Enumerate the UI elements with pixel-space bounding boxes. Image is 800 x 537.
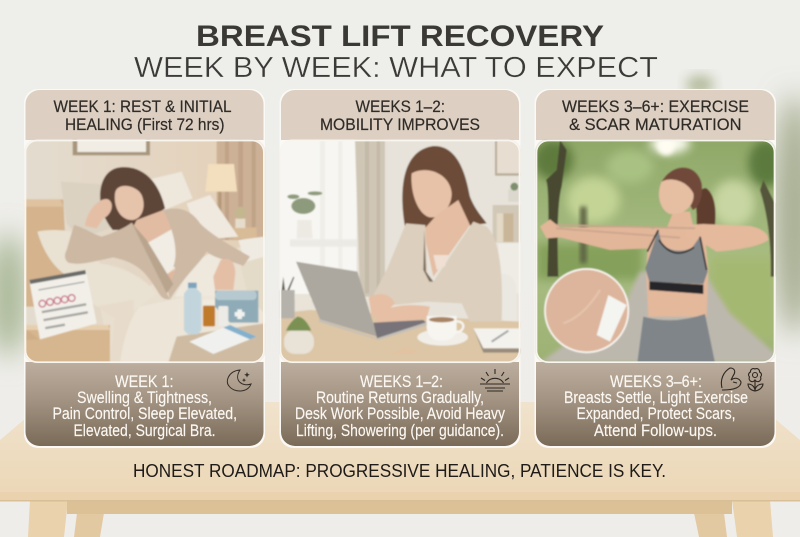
- title: BREAST LIFT RECOVERY: [196, 20, 604, 53]
- panel frame week 1: [24, 89, 265, 448]
- description weeks 1-2: WEEKS 1–2:: [360, 373, 443, 391]
- description week 1: Elevated, Surgical Bra.: [74, 422, 216, 440]
- panel frame weeks 3-6+: [534, 89, 776, 448]
- illustration: woman working on laptop: [280, 140, 520, 363]
- heading weeks 3-6+: & SCAR MATURATION: [569, 115, 742, 134]
- description week 1: Pain Control, Sleep Elevated,: [52, 405, 237, 423]
- description weeks 3-6+: Expanded, Protect Scars,: [576, 405, 736, 423]
- heading weeks 1-2: MOBILITY IMPROVES: [320, 115, 480, 134]
- heading week 1: [54, 97, 232, 134]
- illustration: woman resting in bed: [23, 137, 264, 363]
- heading weeks 3-6+: [562, 97, 749, 134]
- icon: flexed arm: [721, 368, 741, 390]
- panel: weeks 1-2: [280, 89, 520, 448]
- subtitle: WEEK BY WEEK: WHAT TO EXPECT: [134, 52, 658, 84]
- panel frame weeks 1-2: [280, 89, 520, 448]
- heading week 1: WEEK 1: REST & INITIAL: [54, 97, 232, 116]
- footer message: HONEST ROADMAP: PROGRESSIVE HEALING, PATIENCE IS KEY.: [133, 460, 666, 481]
- icon: moon and stars: [227, 370, 251, 391]
- panel: week 1: [23, 89, 265, 448]
- heading weeks 1-2: WEEKS 1–2:: [356, 97, 445, 116]
- description week 1: Swelling & Tightness,: [77, 389, 212, 407]
- panel: weeks 3-6+: [533, 89, 785, 448]
- description week 1: [52, 373, 237, 440]
- description weeks 1-2: [295, 373, 506, 440]
- description weeks 3-6+: Attend Follow-ups.: [594, 422, 717, 440]
- description weeks 3-6+: WEEKS 3–6+:: [610, 373, 702, 391]
- icon: sunrise: [480, 369, 510, 391]
- icon: flower: [748, 369, 763, 391]
- wooden table: [0, 402, 800, 537]
- description weeks 3-6+: [564, 373, 748, 440]
- illustration: woman exercising with band: [533, 133, 785, 363]
- heading week 1: HEALING (First 72 hrs): [65, 115, 224, 134]
- description weeks 3-6+: Breasts Settle, Light Exercise: [564, 389, 748, 407]
- description weeks 1-2: Desk Work Possible, Avoid Heavy: [295, 405, 506, 423]
- description week 1: WEEK 1:: [115, 373, 174, 391]
- description weeks 1-2: Lifting, Showering (per guidance).: [296, 422, 504, 440]
- description weeks 1-2: Routine Returns Gradually,: [316, 389, 484, 407]
- heading weeks 3-6+: WEEKS 3–6+: EXERCISE: [562, 97, 749, 116]
- heading weeks 1-2: [320, 97, 480, 134]
